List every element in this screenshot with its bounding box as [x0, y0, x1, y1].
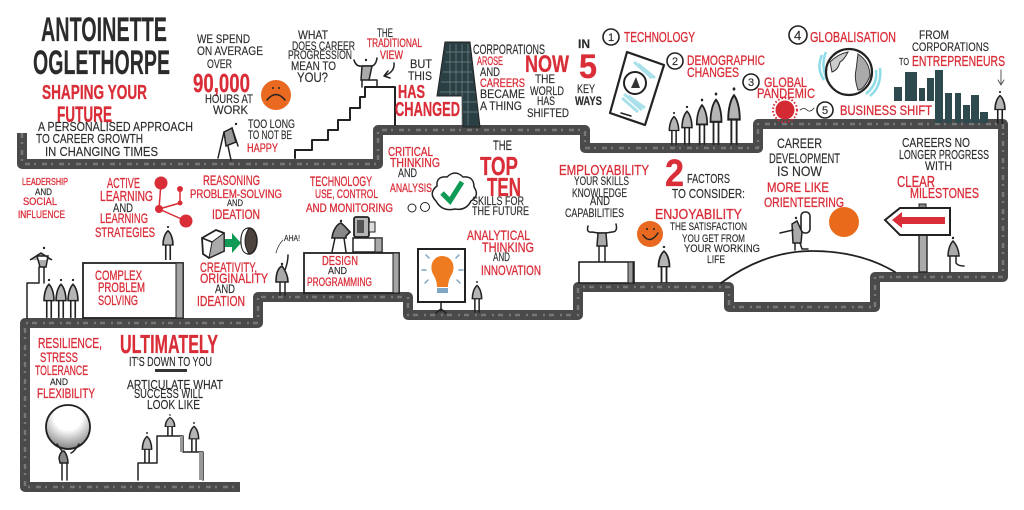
text: now the world has shifted: THE — [535, 72, 555, 86]
text: reasoning: AND — [227, 198, 243, 208]
text: in 5 key ways — [575, 37, 602, 108]
icon: virus — [773, 98, 814, 122]
text: corporations arose: CORPORATIONS — [473, 41, 545, 57]
text: now the world has shifted: WORLD — [530, 84, 564, 98]
text: what does career progression mean: YOU? — [297, 69, 328, 85]
icon: orange sun — [829, 207, 859, 237]
text: 2 factors: TO CONSIDER: — [672, 186, 745, 201]
text: employability: CAPABILITIES — [565, 206, 624, 220]
chart: startup skyline — [894, 70, 988, 123]
box: complex problem solving: PROBLEM — [98, 279, 145, 295]
text: 90,000 hours: HOURS AT — [205, 92, 254, 106]
icon: globe — [819, 49, 880, 96]
text: leadership — [18, 177, 68, 221]
text: critical thinking: THINKING — [390, 155, 440, 170]
text: but this has changed — [395, 57, 460, 121]
text: employability — [559, 162, 649, 220]
text: resilience: STRESS — [40, 349, 78, 365]
text: now the world has shifted: NOW — [525, 51, 569, 78]
arrow: to traditional view — [384, 63, 394, 78]
text: the top ten: TOP — [480, 151, 518, 181]
text: what does career progression mean: DOES CAREER — [292, 39, 355, 53]
item 2: demographic changes: CHANGES — [687, 64, 739, 80]
icon: corporate tower — [437, 42, 480, 127]
item 3: global pandemic: PANDEMIC — [757, 85, 815, 101]
text: 90,000 hours: WORK — [213, 103, 248, 117]
text: too long to not be happy — [247, 117, 295, 155]
text: careers no longer: CAREERS NO — [902, 135, 970, 150]
text: leadership: AND — [35, 187, 52, 197]
text: the top ten: THE — [493, 137, 512, 153]
text: enjoyability: YOUR WORKING — [684, 243, 760, 255]
text: too long to not be happy: TO NOT BE — [248, 128, 292, 142]
person: on box — [163, 226, 173, 260]
text: 2 factors: FACTORS — [687, 171, 730, 186]
text: what does career progression mean — [288, 28, 355, 85]
text: creativity: AND — [215, 282, 235, 296]
text: too long to not be happy: HAPPY — [247, 141, 278, 155]
text: 2 factors — [665, 153, 745, 201]
item 2: demographic changes: 2 — [672, 56, 678, 68]
text: articulate what success: LOOK LIKE — [147, 397, 200, 412]
arrow: down to entrepreneur — [998, 70, 1004, 85]
item 2: demographic changes: DEMOGRAPHIC — [687, 52, 765, 68]
text: resilience: TOLERANCE — [35, 362, 88, 378]
text: careers no longer: WITH — [925, 159, 952, 173]
text: now the world has shifted — [525, 51, 569, 120]
title: OGLETHORPE — [33, 44, 170, 82]
box: complex problem solving: COMPLEX — [95, 267, 142, 283]
text: 90,000 hours: OVER — [207, 57, 232, 71]
text: 2 factors: 2 — [665, 153, 684, 195]
item 5: business shift — [817, 102, 932, 118]
icon: signpost — [885, 204, 950, 272]
text: careers no longer — [897, 135, 989, 202]
hill — [721, 251, 895, 283]
text: analytical thinking: THINKING — [482, 239, 534, 255]
item 1: technology — [603, 29, 695, 46]
item 5: business shift: BUSINESS SHIFT — [840, 102, 932, 118]
text: articulate what success: SUCCESS WILL — [134, 386, 203, 401]
tagline: IN CHANGING TIMES — [45, 144, 158, 159]
box: complex problem solving: SOLVING — [98, 292, 138, 308]
text: reasoning: IDEATION — [212, 206, 260, 222]
text: but this has changed: THIS — [408, 69, 432, 83]
tagline — [36, 119, 193, 159]
text: creativity: ORIGINALITY — [200, 270, 269, 286]
icon: light bulb on board — [418, 249, 465, 313]
person: holding ball — [46, 405, 90, 480]
text: employability: YOUR SKILLS — [574, 174, 629, 188]
text: reasoning — [190, 172, 282, 222]
subtitle: shaping your future: FUTURE — [57, 102, 112, 127]
text: employability: AND — [590, 194, 610, 208]
text: in 5 key ways: 5 — [579, 48, 597, 86]
text: corporations arose: AND — [480, 65, 500, 79]
text: enjoyability: LIFE — [707, 254, 725, 266]
text: resilience: AND — [50, 377, 68, 387]
text: employability: EMPLOYABILITY — [559, 162, 649, 179]
text: what does career progression mean: PROGRESSION — [288, 48, 352, 62]
podium with people — [138, 414, 203, 480]
box: design and programming — [304, 253, 399, 293]
text: creativity: CREATIVITY, — [200, 259, 257, 275]
subtitle: shaping your future: SHAPING YOUR — [42, 82, 147, 104]
text: now the world has shifted: HAS — [537, 94, 555, 108]
subtitle: shaping your future — [42, 82, 147, 127]
text: corporations arose: CAREERS — [480, 76, 525, 90]
text: 90,000 hours — [193, 32, 263, 117]
text: enjoyability — [655, 206, 760, 266]
text: 90,000 hours: WE SPEND — [197, 32, 250, 46]
text: too long to not be happy: TOO LONG — [248, 117, 295, 131]
person: entrepreneur — [995, 91, 1005, 124]
text: corporations arose: AROSE — [477, 54, 503, 68]
text: ultimately: ULTIMATELY — [120, 329, 218, 359]
icon: thought cloud with check — [408, 173, 476, 212]
people: leader on block — [27, 247, 78, 318]
text: career development: DEVELOPMENT — [769, 150, 840, 166]
box: complex problem solving — [83, 263, 183, 318]
item 5: business shift: 5 — [822, 105, 828, 117]
text: 90,000 hours: ON AVERAGE — [197, 44, 263, 58]
text: creativity — [197, 259, 269, 310]
text: what does career progression mean: WHAT — [298, 28, 329, 42]
text: resilience — [35, 335, 102, 401]
text: leadership: LEADERSHIP — [22, 177, 68, 188]
text: career development: IS NOW — [777, 163, 823, 179]
text: the top ten: TEN — [487, 172, 521, 202]
item 4: globalisation: GLOBALISATION — [810, 29, 896, 46]
item 1: technology: TECHNOLOGY — [624, 29, 695, 46]
tagline: A PERSONALISED APPROACH — [38, 119, 193, 134]
staircase band — [22, 124, 1003, 487]
icon: smartphone — [610, 52, 664, 125]
text: analytical thinking — [467, 227, 541, 278]
icon: cube through lens — [202, 228, 257, 258]
text: from corporations to entrepreneurs: TO — [899, 57, 909, 68]
box: design and programming: PROGRAMMING — [307, 275, 372, 289]
text: active learning: ACTIVE — [107, 175, 140, 192]
text: technology use: AND MONITORING — [306, 201, 393, 215]
text: but this has changed: HAS — [398, 82, 425, 102]
text: critical thinking — [388, 144, 440, 195]
item 4: globalisation — [789, 26, 896, 46]
person: strong on box — [579, 224, 634, 283]
icon: sad face — [261, 80, 291, 110]
item 3: global pandemic — [743, 74, 815, 101]
text: but this has changed: CHANGED — [395, 99, 460, 121]
item 3: global pandemic: 3 — [748, 77, 754, 89]
text: ultimately: IT'S DOWN TO YOU — [129, 354, 212, 369]
title: ANTOINETTE — [41, 11, 167, 49]
text: reasoning: PROBLEM-SOLVING — [190, 187, 282, 201]
person: aha: AHA! — [284, 234, 300, 243]
text: but this has changed: BUT — [410, 57, 433, 71]
person at computer — [332, 217, 382, 252]
icon: red network — [154, 176, 192, 228]
text: the traditional view: VIEW — [380, 48, 404, 62]
text: articulate what success: ARTICULATE WHAT — [127, 377, 223, 392]
text: analytical thinking: ANALYTICAL — [467, 227, 530, 243]
box: design and programming: DESIGN — [322, 253, 358, 268]
item 4: globalisation: 4 — [794, 28, 801, 43]
text: analytical thinking: AND — [493, 250, 510, 264]
text: in 5 key ways: KEY — [577, 82, 595, 96]
person: thinking — [218, 123, 238, 160]
text: active learning — [95, 175, 155, 240]
text: enjoyability: THE SATISFACTION — [670, 221, 747, 233]
text: enjoyability: YOU GET FROM — [682, 233, 745, 245]
text: analytical thinking: INNOVATION — [481, 262, 541, 278]
text: resilience: RESILIENCE, — [38, 335, 102, 352]
text: enjoyability: ENJOYABILITY — [655, 206, 742, 223]
people: growing figures — [669, 87, 740, 145]
person: beside face — [658, 246, 670, 283]
text: critical thinking: AND — [398, 166, 417, 180]
text: ultimately — [120, 329, 218, 372]
text: corporations arose: BECAME — [480, 87, 525, 101]
text: now the world has shifted: SHIFTED — [527, 106, 569, 120]
box: design and programming: AND — [328, 266, 347, 277]
text: corporations arose — [473, 41, 545, 113]
text: leadership: SOCIAL — [23, 196, 57, 208]
text: creativity: IDEATION — [197, 293, 245, 310]
text: resilience: FLEXIBILITY — [37, 385, 95, 401]
text: in 5 key ways: WAYS — [575, 94, 602, 108]
text: technology use: TECHNOLOGY — [310, 173, 372, 189]
text: employability: KNOWLEDGE — [572, 186, 627, 200]
stairs with person — [295, 58, 395, 158]
text: technology use — [306, 173, 393, 215]
person: aha — [276, 234, 300, 295]
text: the traditional view: THE — [377, 26, 393, 40]
text: the top ten — [480, 137, 521, 202]
text: in 5 key ways: IN — [578, 37, 590, 51]
text: career development: ORIENTEERING — [764, 194, 844, 210]
text: articulate what success — [127, 377, 223, 412]
tagline: TO CAREER GROWTH — [36, 131, 143, 146]
text: skills for the future: SKILLS FOR — [472, 194, 524, 208]
text: the traditional view — [367, 26, 422, 62]
text: active learning: STRATEGIES — [95, 224, 155, 240]
text: from corporations to entrepreneurs — [899, 28, 1005, 70]
text: technology use: USE, CONTROL — [315, 187, 378, 201]
text: careers no longer: CLEAR — [897, 174, 935, 191]
title — [33, 11, 170, 82]
text: reasoning: REASONING — [203, 172, 260, 188]
item 3: global pandemic: GLOBAL — [764, 74, 807, 90]
text: what does career progression mean: MEAN TO — [291, 59, 336, 73]
text: corporations arose: A THING — [480, 99, 522, 113]
text: from corporations to entrepreneurs: CORPORATIONS — [912, 40, 989, 54]
text: critical thinking: ANALYSIS — [390, 181, 432, 195]
text: from corporations to entrepreneurs: FROM — [919, 28, 949, 42]
text: active learning: LEARNING — [100, 188, 153, 205]
text: skills for the future — [472, 194, 529, 218]
text: skills for the future: THE FUTURE — [472, 204, 529, 218]
text: active learning: AND — [113, 201, 133, 215]
text: 90,000 hours: 90,000 — [193, 68, 250, 98]
person: hiker — [780, 212, 810, 250]
item 2: demographic changes — [667, 52, 765, 80]
text: the traditional view: TRADITIONAL — [367, 36, 422, 50]
text: careers no longer: MILESTONES — [910, 185, 979, 202]
person: at signpost — [948, 237, 964, 272]
text: leadership: INFLUENCE — [18, 209, 65, 221]
text: career development: MORE LIKE — [767, 179, 829, 195]
icon: smiling face — [637, 221, 663, 247]
item 1: technology: 1 — [608, 32, 614, 44]
text: career development: CAREER — [777, 135, 822, 151]
text: critical thinking: CRITICAL — [388, 144, 433, 159]
text: career development — [764, 135, 844, 210]
person: by board — [472, 281, 482, 313]
text: active learning: LEARNING — [100, 210, 148, 226]
